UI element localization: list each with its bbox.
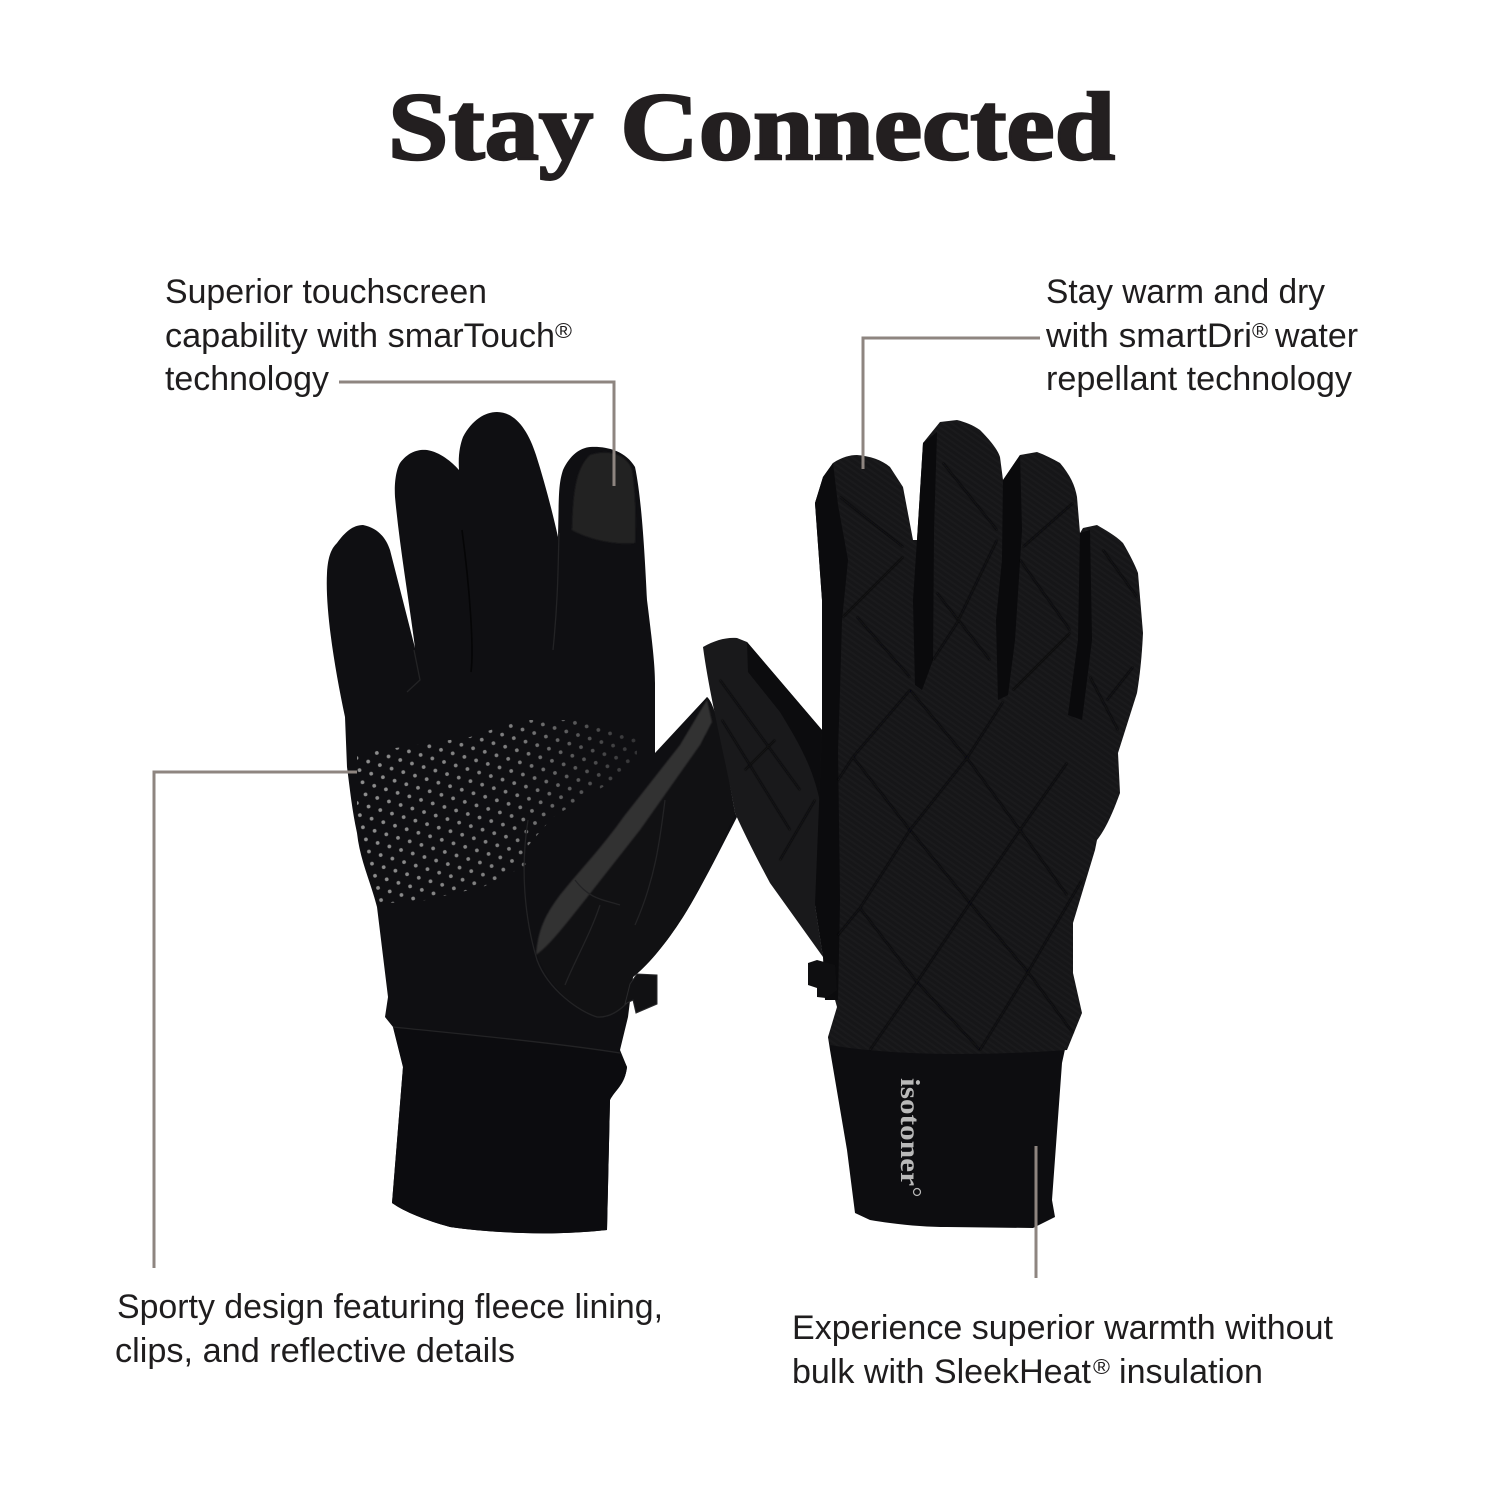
right glove wrist clip [808, 960, 837, 998]
callout: water repellant: repellant technology [1046, 360, 1352, 398]
left glove wrist clip [625, 974, 657, 1013]
callout: insulation [792, 1146, 1334, 1391]
callout: water repellant: with smartDri [1045, 317, 1252, 355]
right glove cuff [828, 1037, 1067, 1228]
callout: touchscreen: ® [555, 320, 573, 343]
callout: water repellant: Stay warm and dry [1046, 273, 1325, 311]
callout: sporty design: clips, and reflective details [115, 1332, 515, 1370]
finger gusset strips [913, 432, 1092, 720]
left glove thumb panel [537, 697, 735, 1017]
left glove: touchscreen palm view [327, 412, 737, 1233]
left glove thumb grey band [536, 700, 712, 955]
right glove side panel [815, 463, 848, 1000]
right glove: quilted back view [703, 420, 1143, 1228]
left glove silhouette [327, 412, 737, 1233]
callout: touchscreen: capability with smarTouch [165, 317, 555, 355]
title: Stay Connected [388, 73, 1115, 180]
callout: water repellant [863, 273, 1358, 469]
isotoner logo: isotoner [895, 1078, 925, 1186]
right glove thumb [703, 638, 830, 957]
right thumb dark strip [747, 642, 822, 812]
left glove cuff shade [392, 1027, 627, 1233]
right glove body and fingers [815, 420, 1143, 1054]
palm dot grip [357, 720, 637, 903]
callout: insulation: ® [1093, 1356, 1111, 1379]
callout: water repellant: water [1274, 317, 1358, 355]
left glove stitching [393, 530, 665, 1053]
callout: insulation: bulk with SleekHeat [792, 1353, 1092, 1391]
callout: sporty design [115, 772, 663, 1370]
callout: insulation: Experience superior warmth without [792, 1309, 1334, 1347]
callout: touchscreen: technology [165, 360, 329, 398]
callout: insulation: insulation [1119, 1353, 1263, 1391]
callout: water repellant: ® [1252, 320, 1269, 343]
quilted diamond stitching [720, 463, 1137, 1050]
callout: touchscreen: Superior touchscreen [165, 273, 487, 311]
callout: sporty design: Sporty design featuring fleece lining, [117, 1288, 663, 1326]
touchscreen fingertip patch [572, 453, 635, 543]
callout: touchscreen [165, 273, 614, 486]
